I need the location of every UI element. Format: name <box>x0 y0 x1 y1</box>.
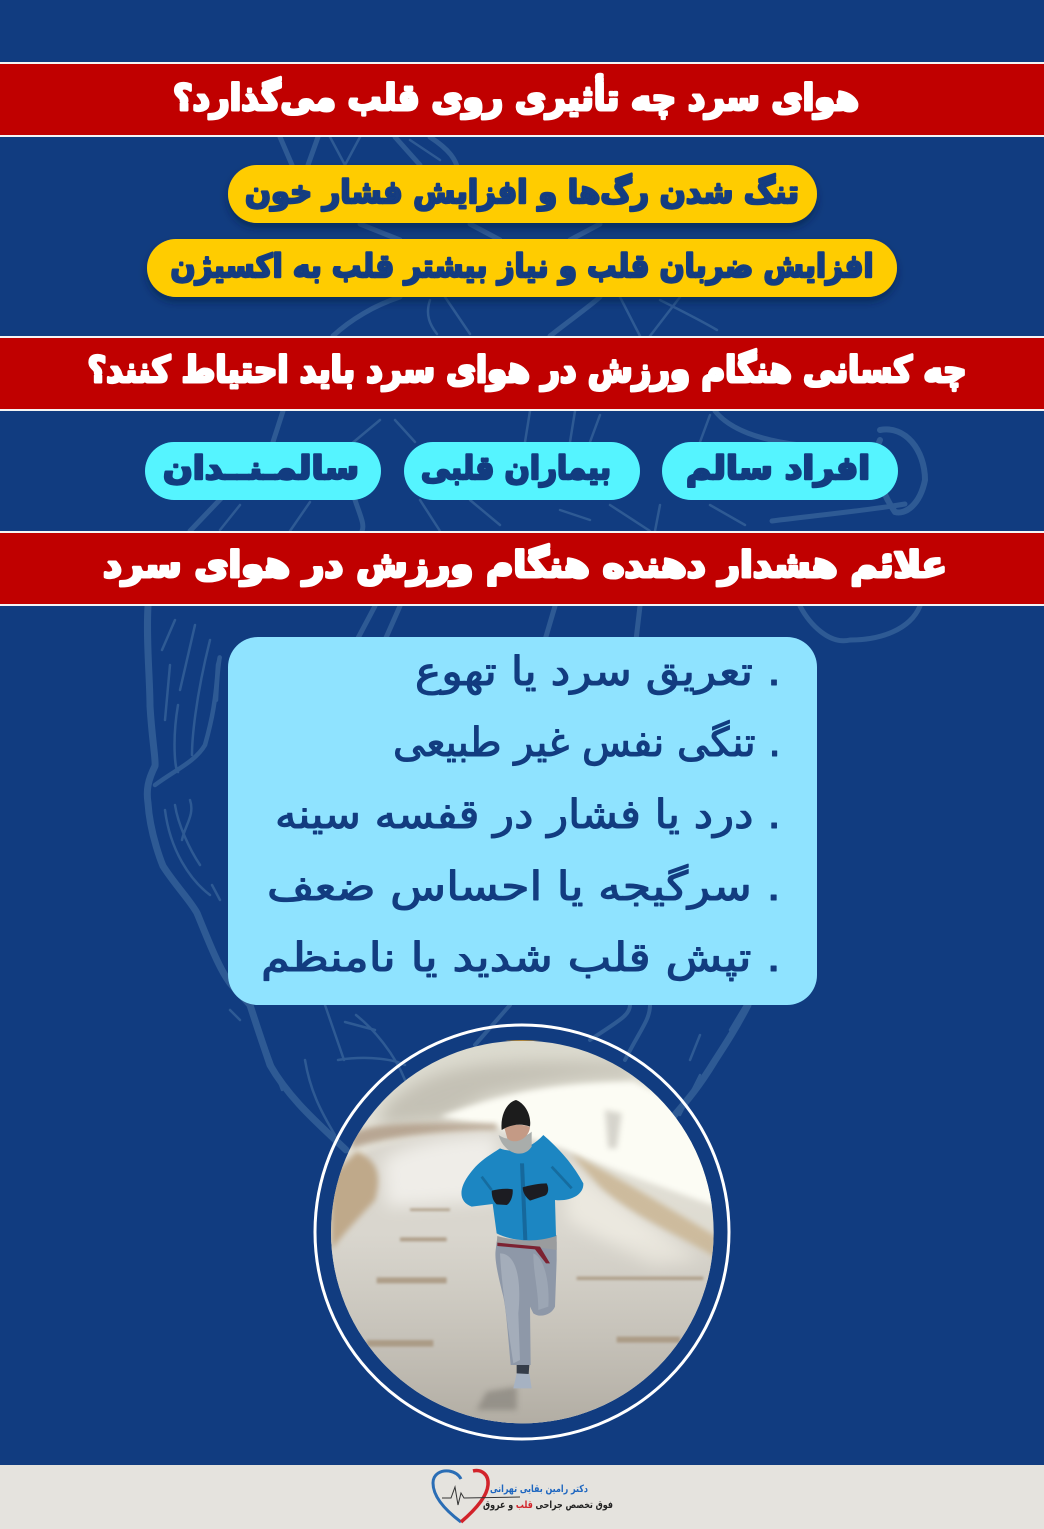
decorative heart line art <box>147 137 925 1150</box>
pill: vessels narrowing: تنگ شدن رگ‌ها و افزایش فشار خون <box>245 173 799 211</box>
logo: heart with ECG and doctor name <box>433 1471 613 1522</box>
footer strip <box>0 1465 1044 1529</box>
pill: elderly: سالمـنــدان <box>163 449 359 487</box>
band: heading 1: هوای سرد چه تأثیری روی قلب می‌گذارد؟ <box>173 74 859 119</box>
pill: healthy people: افراد سالم <box>686 449 870 487</box>
sign 4: . سرگیجه یا احساس ضعف <box>267 864 781 910</box>
pill: heart rate <box>147 239 897 297</box>
pill: heart patients: بیماران قلبی <box>421 449 611 487</box>
sign 3: . درد یا فشار در قفسه سینه <box>275 792 781 838</box>
pill: heart rate: افزایش ضربان قلب و نیاز بیشتر قلب به اکسیژن <box>170 247 874 285</box>
photo: man running in winter, framed by white ring <box>315 1025 729 1439</box>
band: heading 3 <box>0 531 1044 606</box>
doctor name: دکتر رامین بقایی تهرانی <box>490 1484 588 1495</box>
pill: elderly <box>145 442 381 500</box>
sign 5: . تپش قلب شدید یا نامنظم <box>261 935 781 981</box>
pill: vessels narrowing <box>228 165 817 223</box>
pill: heart patients <box>404 442 640 500</box>
specialty: فوق تخصص جراحی قلب و عروق <box>483 1500 613 1511</box>
band: heading 1 <box>0 62 1044 137</box>
sign 1: . تعریق سرد یا تهوع <box>415 649 781 695</box>
band: heading 2 <box>0 336 1044 411</box>
sign 2: . تنگی نفس غیر طبیعی <box>393 720 781 766</box>
band: heading 3: علائم هشدار دهنده هنگام ورزش در هوای سرد <box>103 544 947 586</box>
panel: warning signs list <box>228 637 817 1005</box>
band: heading 2: چه کسانی هنگام ورزش در هوای سرد باید احتیاط کنند؟ <box>88 349 966 391</box>
pill: healthy people <box>662 442 898 500</box>
